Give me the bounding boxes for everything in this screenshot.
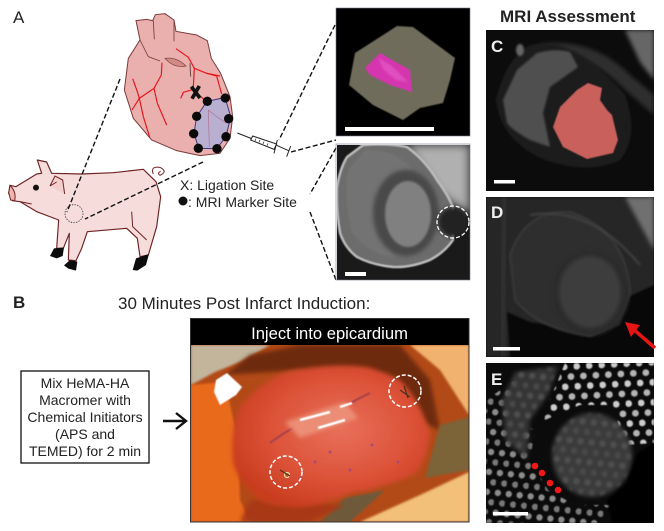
- text box: mixing instructions: Macromer with: [39, 392, 131, 408]
- icon: red arrow: [625, 322, 655, 348]
- marker dots: [189, 93, 233, 153]
- text box: mixing instructions: Mix HeMA-HA: [41, 375, 130, 391]
- heading: panel letter A: A: [13, 8, 25, 27]
- photo header: [190, 318, 469, 345]
- photo header: Inject into epicardium: [251, 324, 408, 343]
- gauze: [214, 373, 242, 405]
- panel: MRI E with red dots: [486, 363, 654, 523]
- panel: surgical photo: [191, 345, 469, 522]
- marker suture details: [280, 386, 410, 478]
- photo background tones: [191, 345, 270, 385]
- icon: syringe: [237, 133, 291, 157]
- panel: MRI D with red arrow: D: [491, 203, 503, 222]
- icon: pig illustration: [9, 160, 164, 271]
- heading: panel letter B: B: [13, 293, 25, 312]
- heading: timing: 30 Minutes Post Infarct Induction:: [118, 294, 370, 313]
- legend: : MRI Marker Site: [188, 194, 297, 210]
- text box: mixing instructions: [21, 371, 149, 463]
- coronary vessels: [132, 49, 222, 138]
- dashed zoom lines: [67, 25, 336, 280]
- highlights: [285, 402, 358, 438]
- heading: MRI Assessment: MRI Assessment: [500, 7, 636, 26]
- purple spots: [298, 444, 400, 480]
- icon: black arrow: [163, 413, 186, 429]
- text box: mixing instructions: Chemical Initiators: [27, 409, 143, 425]
- panel: MRI C with segmented ventricle: [486, 30, 654, 191]
- photo frame: [190, 318, 469, 522]
- suture line: [270, 393, 370, 443]
- ligation X: [191, 86, 200, 99]
- epicardium: [232, 365, 430, 507]
- panel border: [336, 144, 470, 280]
- icon: heart illustration: [124, 14, 233, 156]
- text box: mixing instructions: TEMED) for 2 min: [29, 443, 141, 459]
- panel: MRI with marker circled: [336, 144, 470, 280]
- legend: [178, 177, 297, 210]
- text box: mixing instructions: (APS and: [55, 426, 115, 442]
- panel: MRI C with segmented ventricle: C: [491, 37, 503, 56]
- legend: X: Ligation Site: [180, 177, 274, 193]
- marker circles on photo: [270, 375, 421, 488]
- panel: 3D heart reconstruction: [336, 8, 470, 136]
- infarct zone: [194, 97, 231, 149]
- panel: MRI E with red dots: E: [491, 370, 502, 389]
- panel: MRI D with red arrow: [486, 197, 654, 357]
